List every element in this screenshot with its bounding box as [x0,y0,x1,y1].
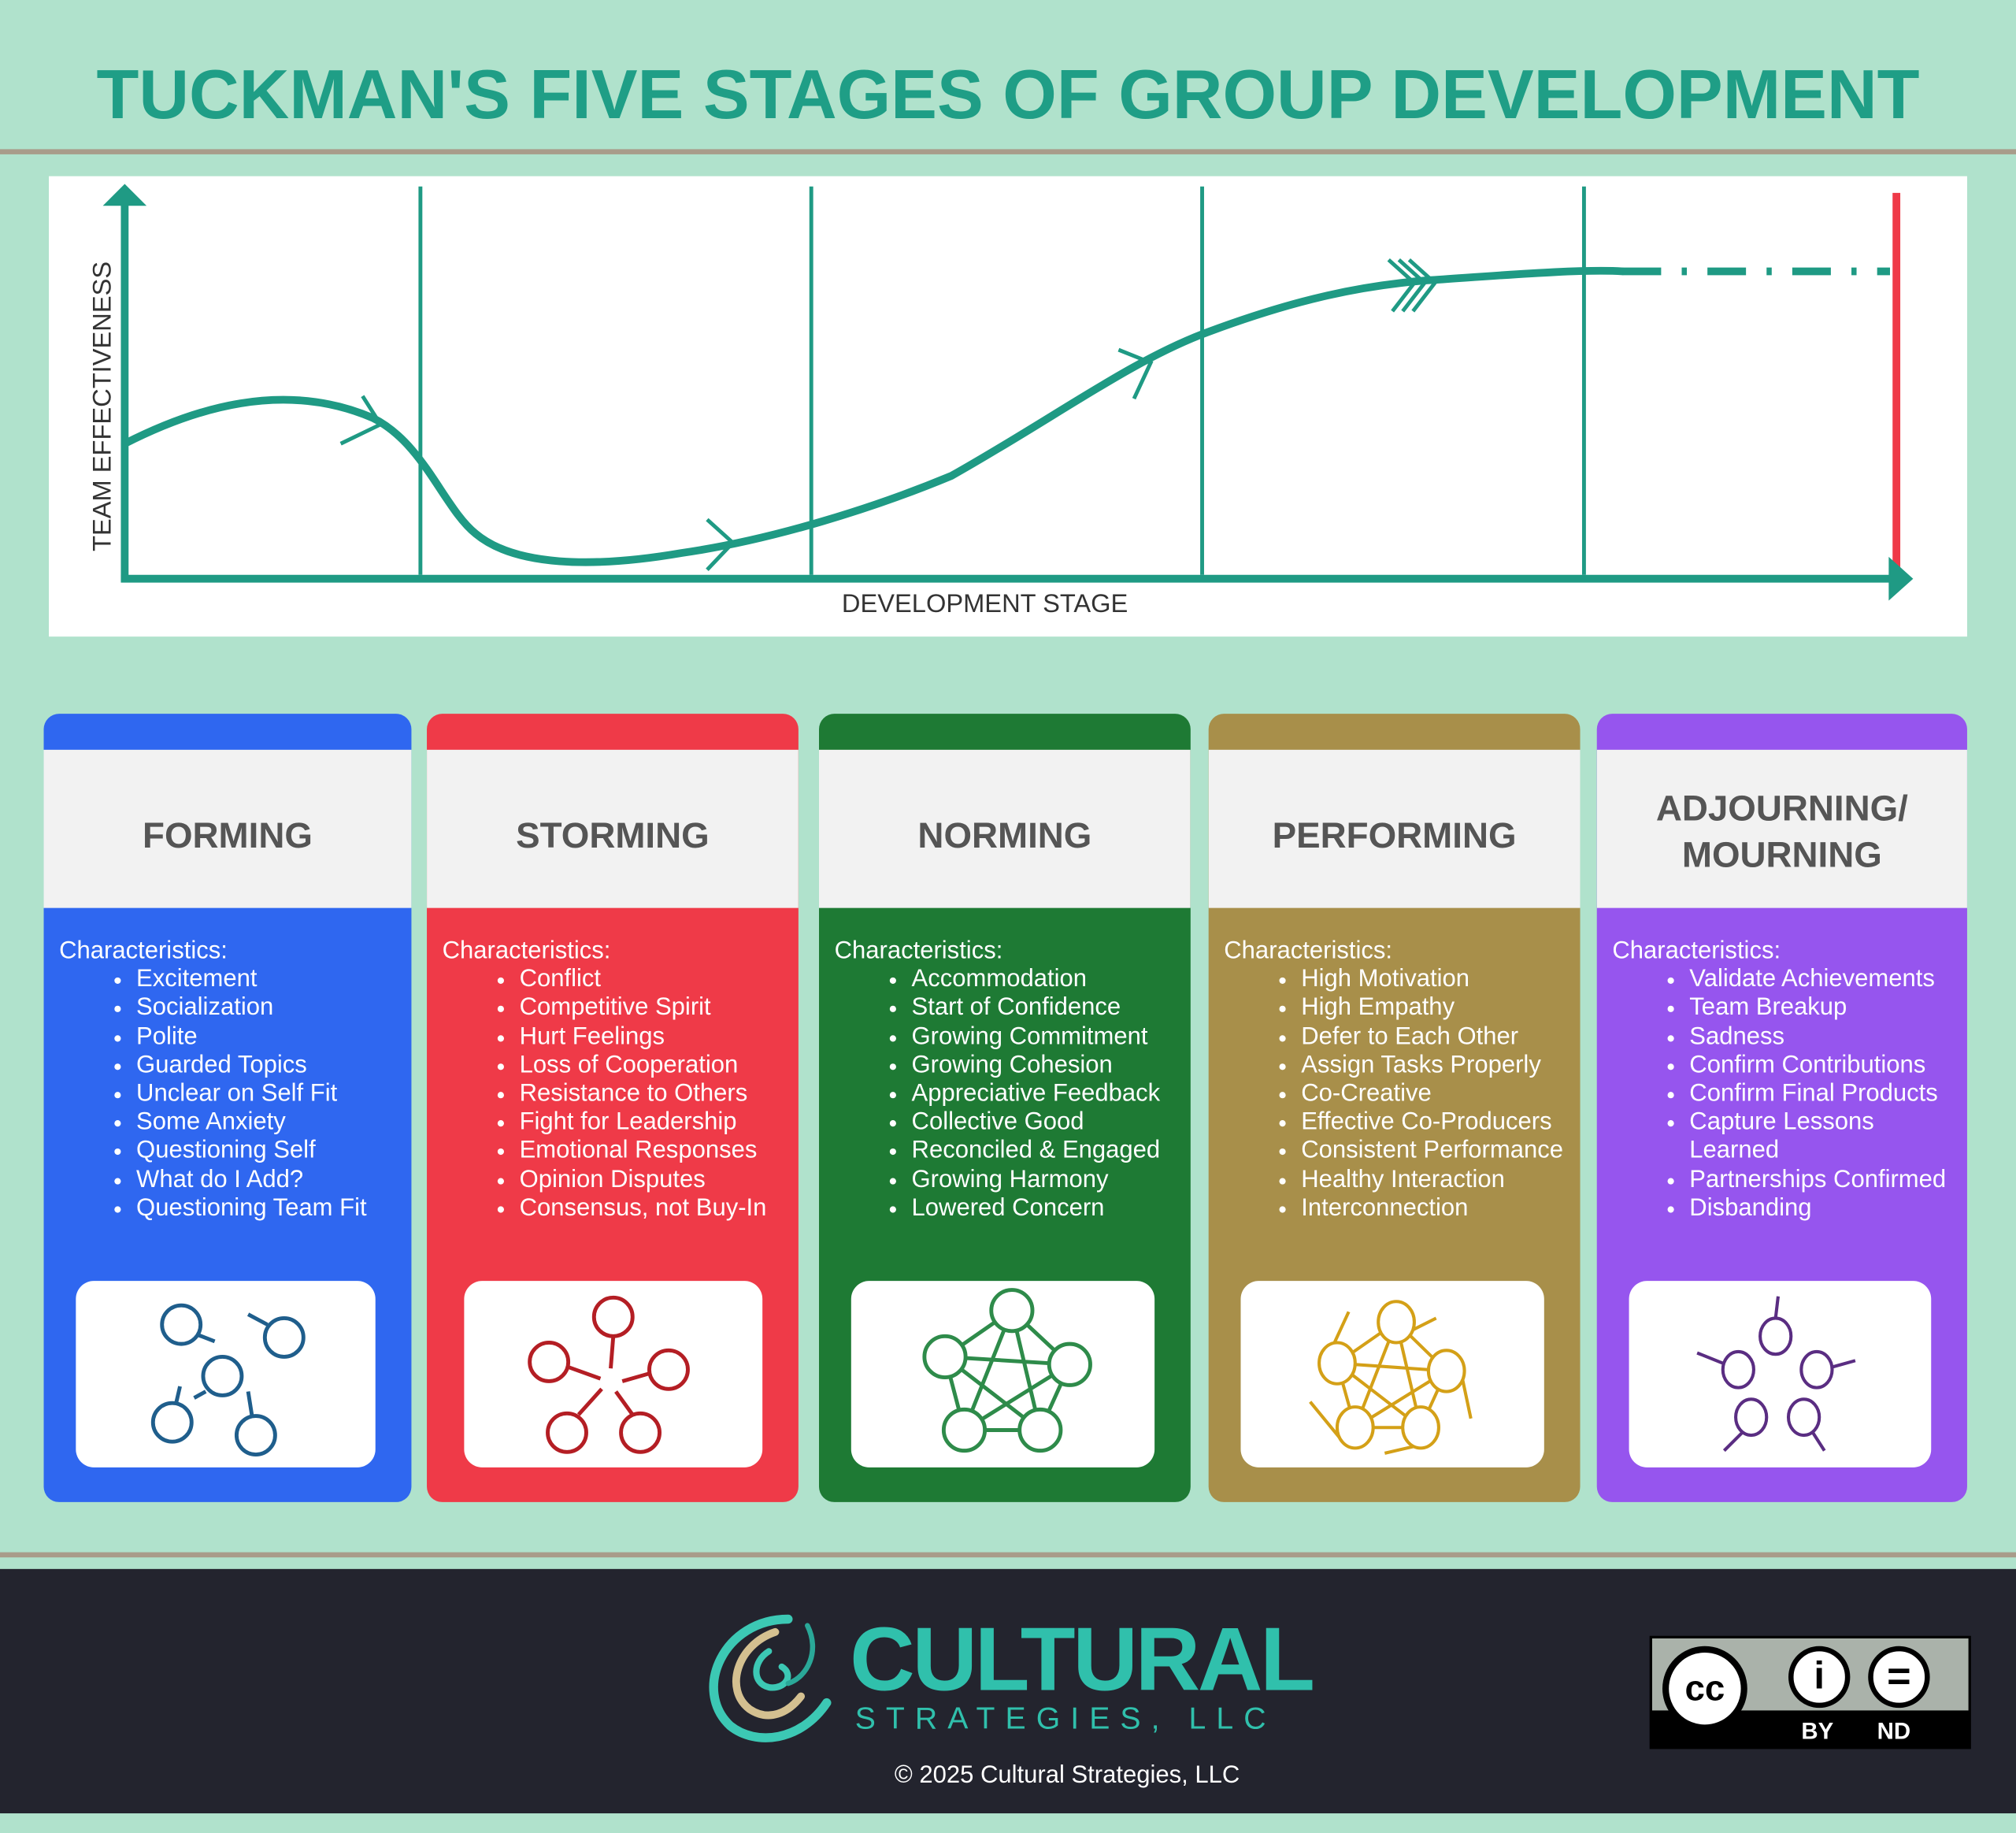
panel: adjourning: Confirm Final Products [1689,1080,1938,1108]
panel: performing: PERFORMING [1273,814,1517,855]
panel: norming: Growing Cohesion [912,1052,1113,1078]
panel: adjourning: MOURNING [1682,834,1882,874]
panel: adjourning: Learned [1689,1137,1779,1164]
panel: performing: Interconnection [1301,1194,1468,1222]
panel: adjourning: Capture Lessons [1689,1109,1874,1136]
panel: norming: Reconciled & Engaged [912,1137,1160,1164]
chart panel: TEAM EFFECTIVENESS [87,262,116,551]
panel: norming: Appreciative Feedback [912,1080,1160,1108]
icon: norming [851,1281,1154,1468]
panel: performing: Characteristics: [1224,937,1392,964]
footer [0,1569,2016,1813]
panel: performing: Healthy Interaction [1301,1166,1505,1193]
title: TUCKMAN'S FIVE STAGES OF GROUP DEVELOPMENT [96,57,1919,134]
panel: forming: Polite [136,1023,198,1050]
cc badge: i [1814,1655,1825,1698]
panel: adjourning: Confirm Contributions [1689,1052,1925,1078]
panel: norming: Growing Harmony [912,1166,1109,1193]
panel: performing: Defer to Each Other [1301,1023,1518,1050]
panel: forming: Socialization [136,995,273,1022]
chart panel: DEVELOPMENT STAGE [842,588,1128,618]
panel: performing: Consistent Performance [1301,1137,1563,1164]
panel: forming: Unclear on Self Fit [136,1080,337,1108]
panel: forming: Some Anxiety [136,1109,286,1136]
panel: performing: Co-Creative [1301,1080,1432,1108]
panel: storming: Loss of Cooperation [520,1052,738,1078]
cc badge: cc [1684,1668,1725,1708]
panel: performing: High Empathy [1301,995,1455,1022]
panel: adjourning [1597,714,1967,1502]
chart panel [49,176,1967,636]
panel: storming: Competitive Spirit [520,995,711,1022]
panel: storming: Hurt Feelings [520,1023,665,1050]
panel: norming: NORMING [917,814,1091,855]
panel: forming: Questioning Team Fit [136,1194,367,1222]
logo: CULTURAL [850,1609,1313,1709]
panel: norming: Start of Confidence [912,995,1121,1022]
panel: norming: Characteristics: [835,937,1002,964]
panel: storming: Fight for Leadership [520,1109,737,1136]
panel: storming [427,714,799,1502]
panel: forming: Characteristics: [59,937,228,964]
icon: storming [464,1281,762,1468]
panel: forming: Excitement [136,966,258,993]
panel: forming: What do I Add? [136,1166,303,1193]
panel: storming: Resistance to Others [520,1080,747,1108]
panel: storming: Characteristics: [443,937,610,964]
logo [709,1609,1313,1742]
panel: forming: Questioning Self [136,1137,316,1164]
icon: performing [1241,1281,1544,1468]
panel: adjourning: Characteristics: [1612,937,1781,964]
cc badge [1650,1636,1971,1749]
panel: performing: High Motivation [1301,966,1469,993]
panel: norming [819,714,1191,1502]
panel: adjourning: Validate Achievements [1689,966,1935,993]
panel: performing [1209,714,1581,1502]
panel: storming: STORMING [516,814,710,855]
cc badge: ND [1877,1718,1910,1744]
logo: STRATEGIES, LLC [855,1701,1277,1736]
panel: norming: Growing Commitment [912,1023,1147,1050]
cc badge: BY [1801,1718,1833,1744]
panel: norming: Accommodation [912,966,1087,993]
panel: adjourning: Team Breakup [1689,995,1847,1022]
icon: adjourning [1629,1281,1931,1468]
curve [124,271,1890,562]
panel: storming: Conflict [520,966,601,993]
panel: performing: Effective Co-Producers [1301,1109,1552,1136]
panel: adjourning: Sadness [1689,1023,1784,1050]
panel: forming [44,714,411,1502]
panel: forming: FORMING [143,814,313,855]
panel: storming: Emotional Responses [520,1137,757,1164]
panel: storming: Consensus, not Buy-In [520,1194,766,1222]
panel: norming: Lowered Concern [912,1194,1104,1222]
panel: storming: Opinion Disputes [520,1166,706,1193]
panel: adjourning: ADJOURNING/ [1656,788,1908,828]
cc badge: = [1887,1653,1911,1699]
panel: forming: Guarded Topics [136,1052,307,1078]
panel: performing: Assign Tasks Properly [1301,1052,1541,1078]
axes [103,184,1913,600]
panel: norming: Collective Good [912,1109,1084,1136]
panel: adjourning: Partnerships Confirmed [1689,1166,1946,1193]
icon: forming [76,1281,376,1468]
copyright: © 2025 Cultural Strategies, LLC [895,1762,1240,1789]
panel: adjourning: Disbanding [1689,1194,1812,1222]
